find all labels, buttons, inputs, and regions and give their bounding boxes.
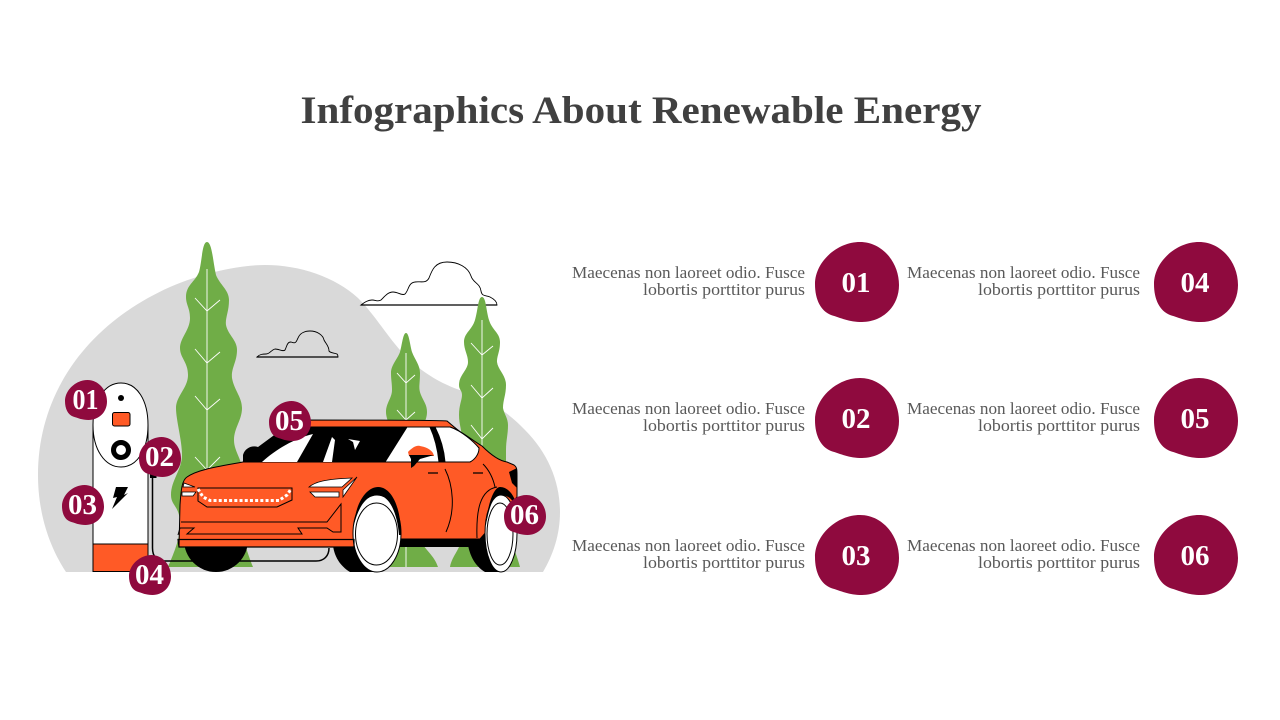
item 03 badge: 03 (842, 540, 870, 572)
item 06 badge (1154, 515, 1238, 595)
item 01 text: Maecenas non laoreet odio. Fusce (572, 263, 805, 282)
tree right (450, 297, 520, 567)
greenhouse (243, 421, 482, 464)
marker 01 (65, 380, 107, 420)
item 06 text: Maecenas non laoreet odio. Fusce (907, 536, 1140, 555)
cloud large (361, 262, 497, 305)
item 06 badge: 06 (1180, 540, 1210, 572)
illustration: electric car charging scene (38, 242, 560, 572)
item 03 text (572, 536, 805, 572)
item 05 badge (1154, 378, 1238, 458)
tyres (184, 508, 248, 572)
marker 06 (504, 495, 546, 535)
charging station (93, 383, 148, 572)
item 01 text: lobortis porttitor purus (643, 280, 805, 299)
item 04 badge (1154, 242, 1238, 322)
wheel arches (354, 487, 401, 535)
item 01 badge: 01 (842, 267, 870, 299)
item 02 badge: 02 (842, 403, 870, 435)
item 04 badge: 04 (1180, 267, 1210, 299)
electric car (178, 420, 517, 572)
marker 02: 02 (145, 442, 174, 473)
item 01 text (572, 263, 805, 299)
item 04 text: Maecenas non laoreet odio. Fusce (907, 263, 1140, 282)
bumper lines (178, 504, 341, 535)
item 03 text: Maecenas non laoreet odio. Fusce (572, 536, 805, 555)
marker 04: 04 (135, 560, 164, 591)
item 06 text (907, 536, 1140, 572)
marker 03: 03 (68, 490, 97, 521)
tree tall (168, 242, 253, 567)
cloud small (257, 331, 338, 357)
item 02 text: lobortis porttitor purus (643, 416, 805, 435)
marker 02 (139, 437, 181, 477)
mirror (408, 446, 434, 456)
body lines (445, 464, 497, 538)
title: Infographics About Renewable Energy (300, 89, 982, 132)
item 05 badge: 05 (1180, 403, 1210, 435)
item 03 badge (815, 515, 899, 595)
marker 06: 06 (510, 500, 539, 531)
item 01 badge (815, 242, 899, 322)
headlights (182, 477, 357, 497)
item 04 text: lobortis porttitor purus (978, 280, 1140, 299)
marker 01: 01 (72, 385, 98, 416)
wheels (353, 495, 401, 572)
grille (198, 488, 292, 507)
marker 04 (129, 555, 171, 595)
item 02 text (572, 399, 805, 435)
cable plug (150, 472, 156, 478)
item 05 text (907, 399, 1140, 435)
item 03 text: lobortis porttitor purus (643, 553, 805, 572)
marker 03 (62, 485, 104, 525)
item 05 text: lobortis porttitor purus (978, 416, 1140, 435)
marker 05: 05 (275, 406, 304, 437)
tree small (386, 333, 438, 567)
item 04 text (907, 263, 1140, 299)
charging cable (152, 476, 329, 561)
item 05 text: Maecenas non laoreet odio. Fusce (907, 399, 1140, 418)
body (179, 420, 517, 547)
item 06 text: lobortis porttitor purus (978, 553, 1140, 572)
windows (262, 434, 313, 462)
item 02 badge (815, 378, 899, 458)
item 02 text: Maecenas non laoreet odio. Fusce (572, 399, 805, 418)
grey background blob (38, 265, 560, 572)
marker 05 (269, 401, 311, 441)
